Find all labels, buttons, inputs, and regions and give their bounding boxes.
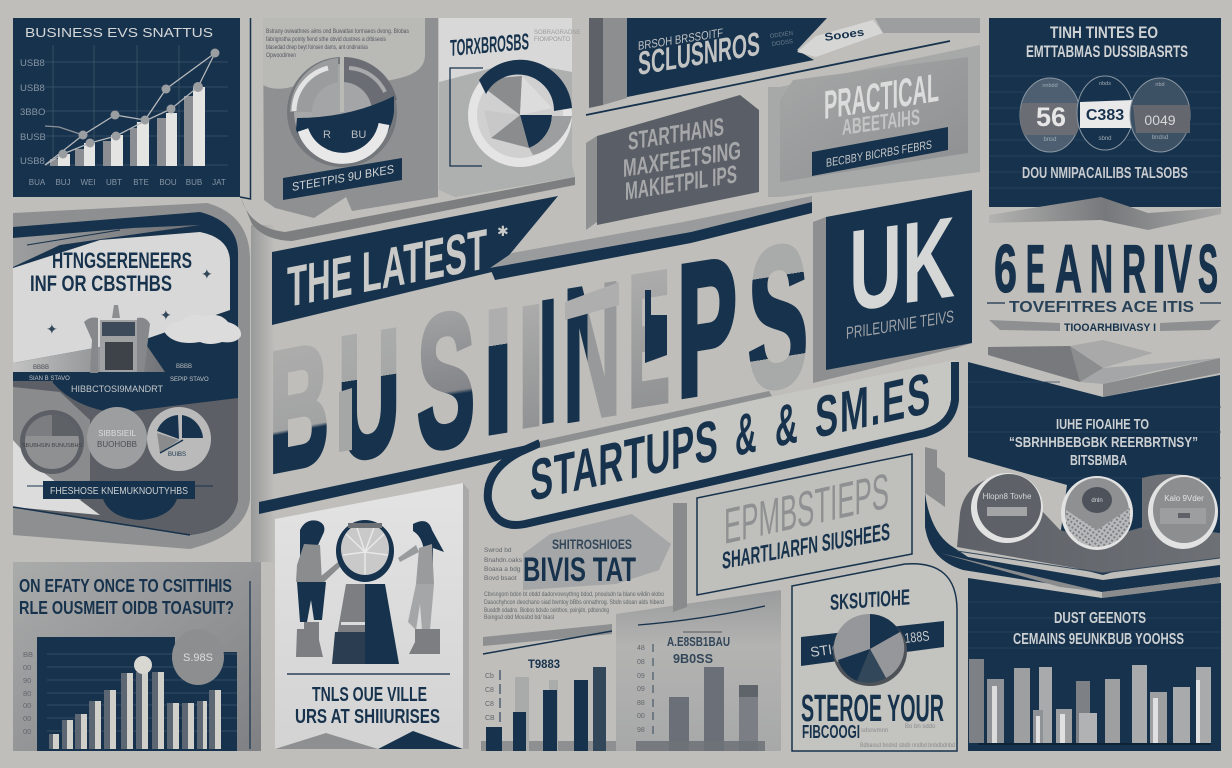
heading: TINH TINTES EO <box>1050 23 1158 42</box>
y labels: 80 <box>23 689 31 698</box>
paragraph: Dasochyhcon deochano siad bwntoy bBbs onnathrog. Sbdn sdoan alds hiberd <box>484 599 664 606</box>
panel: geanrivs heading: I <box>1152 231 1166 307</box>
axis labels: 98 <box>637 727 645 734</box>
ribbon caption: STEETPIS 9U BKES <box>292 162 394 194</box>
x axis labels: BTE <box>133 178 149 187</box>
tiny crowd labels: SEPIP STAVO <box>170 377 209 383</box>
panel: uk block: UK <box>849 193 955 336</box>
axis labels: 09 <box>637 673 645 680</box>
paragraph: Cbvsngom bdon bt obdd dadorvowsythng bdod, pnoulsdn ta blano wildin elobo <box>484 591 664 598</box>
x axis labels: BOU <box>159 178 177 187</box>
circle: right <box>147 407 211 471</box>
dark swoosh <box>957 474 1220 573</box>
chart: right column chart <box>616 503 781 751</box>
fine print: Bo bn sddo <box>905 724 936 730</box>
panel: empsteps box: SHARTLIARFN SIUSHEES <box>722 519 890 575</box>
small label: SHITROSHIOES <box>552 536 632 552</box>
vertical connector shading <box>251 225 275 562</box>
icons: small markers: ✦ <box>160 307 172 323</box>
y axis labels: BUSB <box>20 132 46 143</box>
small side text: SOBRAGRADNE <box>534 30 581 36</box>
stat: first circle: 56 <box>1036 102 1066 132</box>
under band <box>940 553 1220 598</box>
x axis labels: JAT <box>212 178 226 187</box>
large label: STEROE YOUR <box>801 688 944 730</box>
sub label: FIBCOOGI <box>802 722 860 742</box>
side lines: Bovd bsaot <box>484 575 517 582</box>
panel: right bottom chart <box>968 578 1221 751</box>
ribbon: startups and smes: SM.ES <box>815 361 930 451</box>
ribbon <box>801 621 944 666</box>
y axis labels: USB8 <box>20 156 45 167</box>
bars <box>49 672 221 749</box>
y labels: 90 <box>23 676 31 685</box>
stat: second circle: sbnd <box>1098 136 1112 142</box>
ribbon side text: ODDIEN <box>769 31 793 40</box>
donut chart: R <box>323 129 331 141</box>
fine print: sdsnvmnn <box>861 728 888 734</box>
axis labels: C8 <box>485 687 494 694</box>
icons: small markers: ✦ <box>46 321 58 337</box>
y labels <box>23 650 33 736</box>
panel: geanrivs heading <box>987 231 1221 334</box>
axis labels <box>637 645 645 734</box>
stat: first circle: bnsd <box>1043 137 1057 143</box>
panel: empsteps box <box>697 454 912 595</box>
pie chart <box>833 614 907 686</box>
light wedge and strip <box>945 457 1067 555</box>
panel: business stats chart <box>13 18 250 199</box>
side lines: Bnahdn.oaks <box>484 557 523 564</box>
title word: business: S <box>417 272 475 491</box>
circle: middle <box>87 407 147 469</box>
stat: third circle: bndsd <box>1152 135 1168 141</box>
stat: third circle: 0049 <box>1144 112 1176 128</box>
panel: geanrivs heading: V <box>1168 231 1192 307</box>
card footer chevrons <box>275 731 463 749</box>
panel: pie summary: TORXBROSBS <box>450 28 529 61</box>
axis labels: 48 <box>637 645 645 652</box>
title accents <box>339 282 667 452</box>
panel: geanrivs heading: E <box>1026 231 1045 307</box>
bars <box>486 667 606 751</box>
circle: left: SBUBHSIN BUNUSBHS <box>22 443 82 449</box>
y labels: 00 <box>23 663 31 672</box>
donut chart: BU <box>351 129 366 141</box>
y labels: 00 <box>23 727 31 736</box>
circle: left badge <box>971 473 1043 543</box>
illustration: figure with backpack <box>84 305 150 373</box>
chart title: BUSINESS EVS SNATTUS <box>25 26 213 40</box>
title word: business: N <box>563 241 621 463</box>
corner tag <box>797 18 980 57</box>
panel: bottom-left bar chart: RLE OUSMEIT OIDB TOASUIT? <box>19 598 234 618</box>
side lines <box>484 547 523 582</box>
panel: startups marketing tips: STARTHANS <box>628 113 724 156</box>
panel: startups marketing tips: MAKIETPIL IPS <box>625 160 737 206</box>
bars <box>969 659 1211 743</box>
icons: small markers: ✦ <box>201 266 213 282</box>
value badge <box>172 629 224 685</box>
axis labels: 00 <box>637 713 645 720</box>
panel: practical areas <box>768 45 980 197</box>
tag line <box>989 320 1221 334</box>
swoosh highlight <box>957 551 1220 573</box>
fine print <box>860 724 955 749</box>
fine print: Bdbaosd bndnd sbdb nndbd bnbdbdnbd <box>860 743 955 749</box>
tiny crowd labels: BBBB <box>33 365 49 371</box>
ribbon: the latest: THE LATEST <box>287 218 487 320</box>
card text: TNLS OUE VILLE <box>312 684 427 706</box>
circle: middle: BUOHOBB <box>97 440 137 449</box>
heading <box>30 248 192 296</box>
stat: third circle <box>1130 78 1190 152</box>
chart: left column chart <box>481 624 616 751</box>
axis labels: Cb <box>485 673 494 680</box>
small side text <box>534 30 581 43</box>
panel: geanrivs heading: 6 <box>994 231 1017 307</box>
ribbon heading: SCLUSNROS <box>638 26 760 83</box>
navy divider band <box>490 196 812 280</box>
small intro text <box>266 28 409 59</box>
bars <box>636 667 765 751</box>
panel: geanrivs heading: A <box>1055 231 1082 307</box>
ribbon <box>812 127 948 176</box>
circle: right badge <box>1148 475 1218 549</box>
panel: donut report <box>263 18 438 218</box>
heading: ON EFATY ONCE TO CSITTIHIS <box>19 576 232 596</box>
donut chart <box>287 57 397 167</box>
text: S <box>748 203 808 433</box>
panel: top right stats <box>989 18 1221 207</box>
side lines: Swrod bd <box>484 547 512 554</box>
big label: BIVIS TAT <box>523 551 636 589</box>
x axis labels: WEI <box>80 178 96 187</box>
panel: central illustration card: URS AT SHIIURISES <box>295 706 440 728</box>
navy field <box>968 362 1220 575</box>
ribbon side text <box>769 31 793 48</box>
y axis labels: 3BBO <box>20 107 45 118</box>
trend lines <box>45 53 215 165</box>
heading: SKSUTIOHE <box>830 584 910 615</box>
paragraph <box>484 591 664 621</box>
ribbon: startups and smes <box>259 360 955 525</box>
ribbon: the latest <box>272 196 558 325</box>
marker <box>134 656 152 674</box>
figure: left person <box>296 520 341 657</box>
ribbon caption: FHESHOSE KNEMUKNOUTYHBS <box>50 485 188 497</box>
axis labels <box>485 673 495 722</box>
subtitle: TOVEFITRES ACE ITIS <box>1009 299 1194 316</box>
panel: empsteps box: EPMBSTIEPS <box>724 462 889 555</box>
title word: business: P <box>677 219 737 438</box>
small side text: FIOMPONTO <box>534 37 571 43</box>
stat: second circle: nbds <box>1099 81 1111 87</box>
title word: business: E <box>628 231 670 448</box>
chevron divider <box>989 197 1221 230</box>
bars <box>50 87 205 166</box>
stat: first circle <box>1020 78 1080 152</box>
small intro text: blasedad dnep beyt foinsen dams, ant ondinarias <box>266 44 368 51</box>
x axis labels: BUA <box>29 178 46 187</box>
value badge: S.98S <box>183 652 213 664</box>
tag line: TIOOARHBIVASY I <box>1064 322 1156 334</box>
x axis labels: BUJ <box>55 178 71 187</box>
y axis labels: USB8 <box>20 83 45 94</box>
panel: startups marketing tips: MAXFEETSING <box>623 136 741 183</box>
axis labels: 08 <box>637 659 645 666</box>
chart background <box>37 637 237 751</box>
illustration: cloud <box>165 315 241 344</box>
small label: BRSOH BRSSOITF <box>638 26 723 53</box>
heading: DUST GEENOTS <box>1054 610 1146 627</box>
small intro text: Opwoodimen <box>266 52 296 59</box>
panel: right middle <box>925 340 1221 598</box>
circle: middle badge <box>1061 476 1133 550</box>
stat: second circle: C383 <box>1086 107 1124 124</box>
y labels: 00 <box>23 701 31 710</box>
panel: geanrivs heading: R <box>1122 231 1146 307</box>
panel: central illustration card <box>275 483 469 749</box>
tiny crowd labels <box>29 364 209 383</box>
small intro text: fabrignstha pointy fiend sthe obvid dustnes a drbiseois <box>266 36 386 43</box>
navy swoosh <box>925 493 1220 592</box>
ribbon: startups and smes: STARTUPS <box>530 408 718 514</box>
panel: uk block: PRILEURNIE TEIVS <box>846 307 954 343</box>
axis labels: CB <box>485 715 495 722</box>
ribbon caption <box>27 481 213 499</box>
curved connector band <box>241 177 575 241</box>
circle: middle badge: dnln <box>1091 498 1103 504</box>
side lines: Boaxa a bdg <box>484 566 521 573</box>
axis labels: 88 <box>637 700 645 707</box>
ribbon: STIO <box>809 640 844 660</box>
panel: practical areas: ABEETAIHS <box>842 104 920 140</box>
y axis labels <box>20 58 46 167</box>
panel: geanrivs heading: N <box>1090 231 1113 307</box>
panel: store your pie <box>792 564 957 751</box>
heading: HTNGSERENEERS <box>52 248 192 273</box>
chart: right column chart: 9B0SS <box>673 651 713 666</box>
pie chart <box>468 60 572 167</box>
icons: small markers <box>46 266 213 337</box>
title word: business: U <box>338 293 400 498</box>
x axis labels: BUB <box>186 178 202 187</box>
x axis labels: UBT <box>106 178 122 187</box>
axis labels: C8 <box>485 701 494 708</box>
lower dark field <box>13 381 238 535</box>
sub caption: HIBBCTOSI9MANDRT <box>71 384 163 395</box>
title word: business: I <box>515 264 547 468</box>
ribbon: 188S <box>904 627 930 646</box>
circle: right badge: Kalo 9Vder <box>1164 494 1204 503</box>
panel: entrepreneurs info <box>13 203 250 549</box>
paragraph: Buoddh odadns. Biobos bdsdo ooitrbon, poinjdn, pdbondng <box>484 607 609 614</box>
x axis labels <box>29 178 226 187</box>
circle: middle: SIBBSIEIL <box>98 429 136 438</box>
figure: right person <box>398 521 444 654</box>
circle: left badge: Hlopn8 Tovhe <box>983 492 1032 501</box>
panel: startups marketing tips <box>586 95 759 230</box>
trophy globe <box>336 520 394 582</box>
panel: solutions ribbon <box>589 18 980 108</box>
panel: uk block <box>813 190 972 383</box>
ribbon: startups and smes: & <box>735 399 757 469</box>
tiny crowd labels: BBBB <box>176 364 192 370</box>
small intro text: Bstrany owwathnes aims ond Buwatlan tormaeos dvong. Blobas <box>266 28 409 35</box>
title word: business: B <box>269 308 329 509</box>
y labels: 00 <box>23 714 31 723</box>
y labels: BB <box>23 650 33 659</box>
stat: second circle <box>1077 76 1133 150</box>
circle: left <box>20 410 84 474</box>
ribbon side text: DODSS <box>771 39 793 48</box>
trophy pedestal <box>332 584 399 664</box>
panel: center bottom article <box>484 514 671 621</box>
chart title: A.E8SB1BAU <box>667 634 730 649</box>
ornament: ✱ <box>497 223 509 239</box>
heading: IUHE FIOAIHE TO <box>1056 416 1149 433</box>
circle: right: BUIBS <box>168 452 186 458</box>
top chevron facets <box>988 340 1220 397</box>
heading: INF OR CBSTHBS <box>30 271 172 296</box>
panel: bottom-left bar chart <box>13 562 261 751</box>
title word: business <box>269 203 808 509</box>
stat: first circle: nnbdd <box>1042 83 1058 89</box>
panel: practical areas: PRACTICAL <box>824 65 939 128</box>
chart title: T9883 <box>528 657 560 671</box>
y axis labels: USB8 <box>20 58 45 69</box>
panel: right middle: BITSBMBA <box>1070 452 1127 469</box>
tiny crowd labels: SIAN B STAVO <box>29 376 70 382</box>
ribbon: BECBBY BICRBS FEBRS <box>826 137 932 170</box>
ribbon: startups and smes: & <box>775 390 798 460</box>
title word: business: I <box>537 260 559 464</box>
panel: pie summary <box>439 18 581 197</box>
stat: third circle: nbd <box>1155 82 1165 88</box>
paragraph: Boingsd obd Mossbd bd/ biasl <box>484 614 554 621</box>
title word: business: I <box>480 266 516 477</box>
corner tag: Sooes <box>824 27 865 44</box>
axis labels: 09 <box>637 686 645 693</box>
